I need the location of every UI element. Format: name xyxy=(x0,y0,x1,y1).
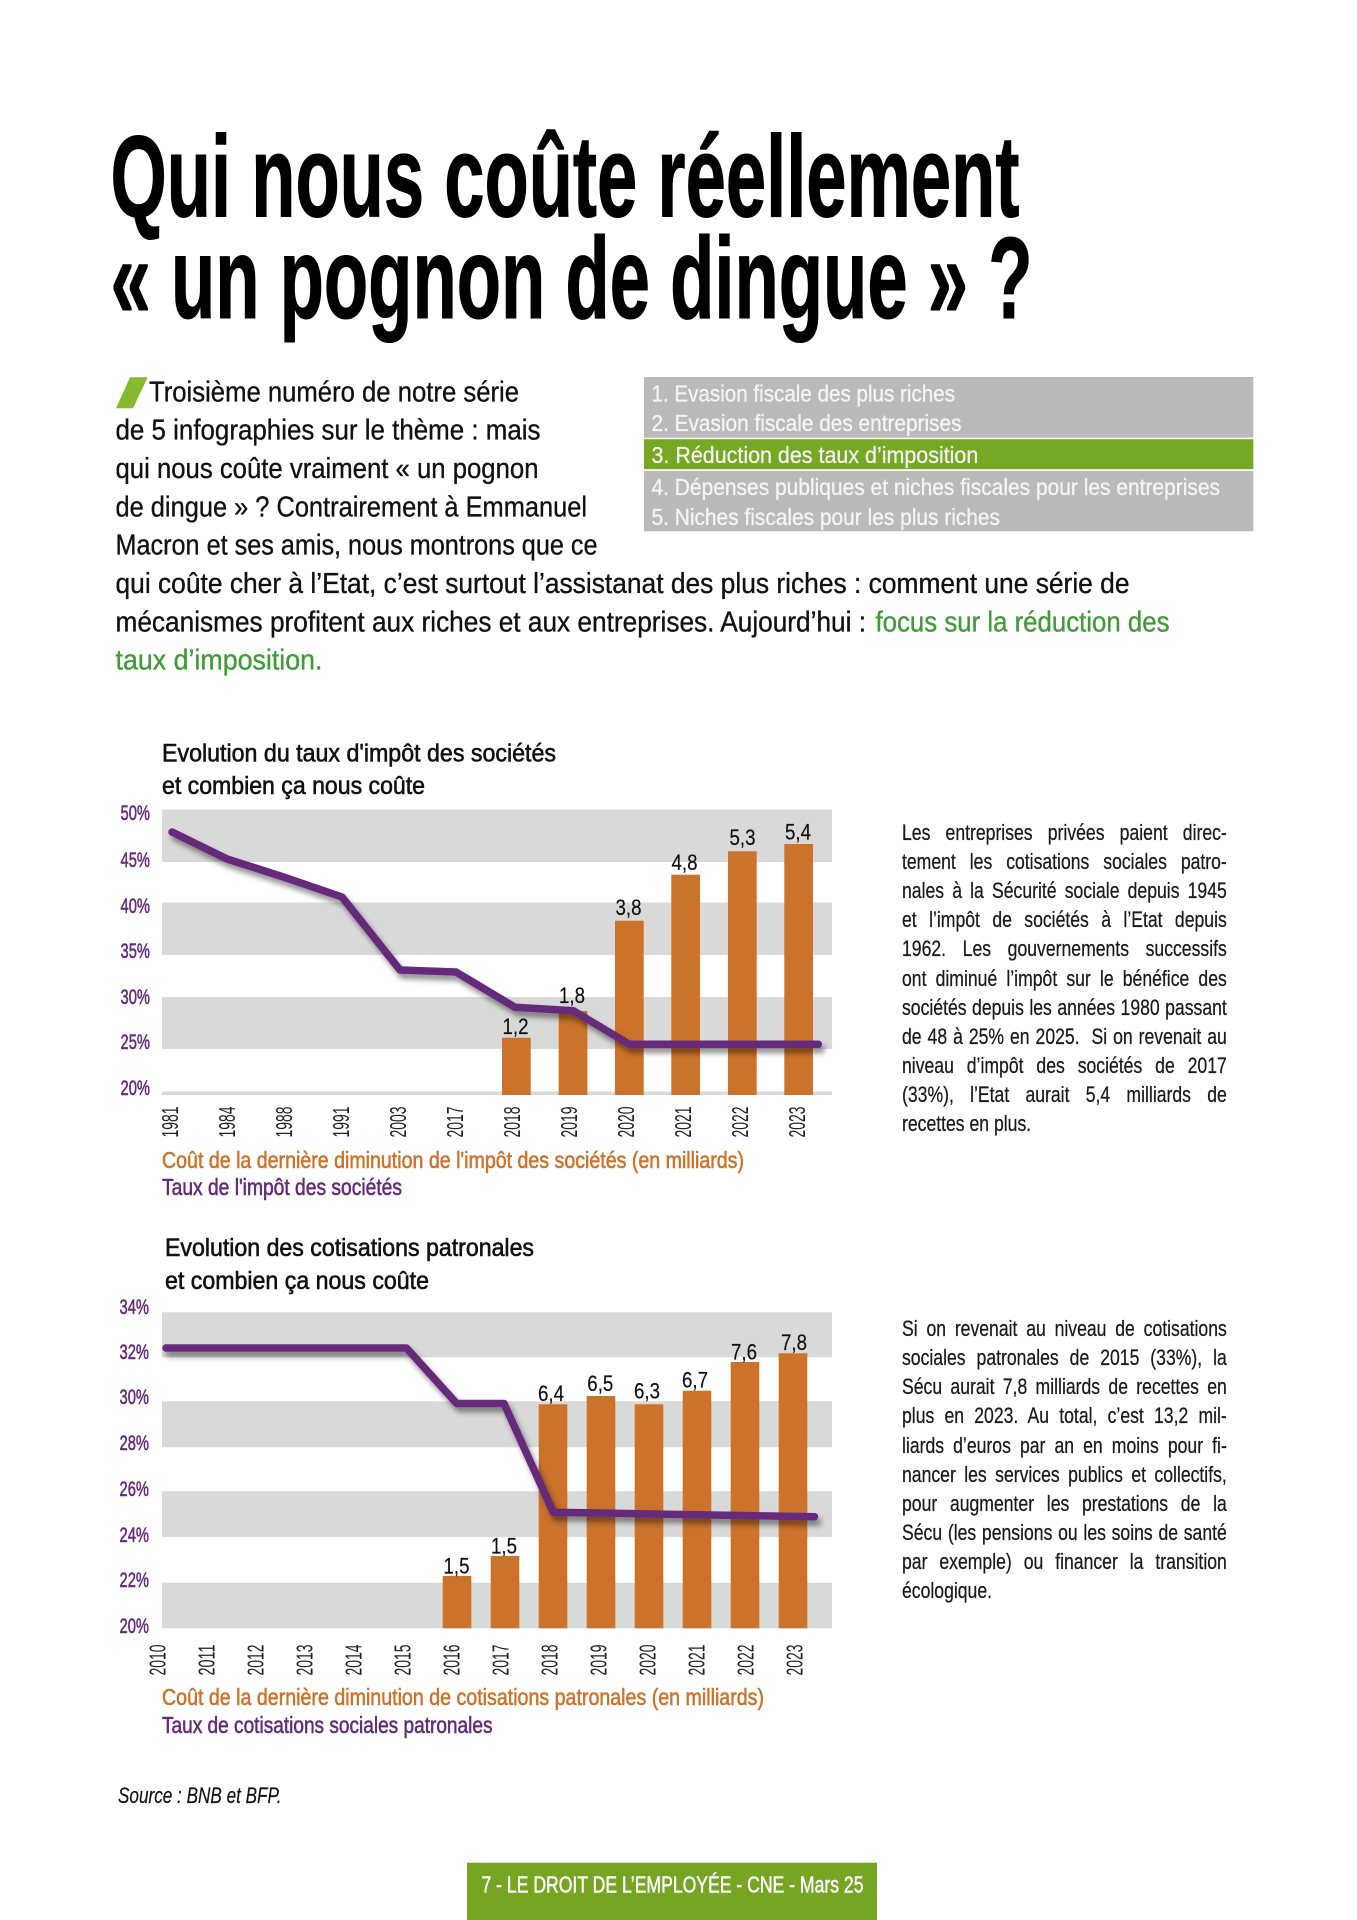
intro text xyxy=(116,376,1170,676)
chart 1 y axis labels xyxy=(120,802,150,1100)
text block: employer contributions explanation: Si on revenait au niveau de cotisations xyxy=(902,1316,1227,1341)
chart 1 x axis labels: 2023 xyxy=(784,1106,810,1138)
chart 1 y axis labels: 20% xyxy=(120,1077,150,1100)
chart 2 y axis labels: 34% xyxy=(120,1296,149,1319)
chart 1 x axis labels: 2022 xyxy=(727,1106,753,1138)
chart 1 legend: Taux de l'impôt des sociétés xyxy=(162,1174,402,1200)
chart 2 bar values: 6,7 xyxy=(682,1368,708,1393)
panel: chart 2 employer contributions xyxy=(120,1234,832,1738)
panel: chart 1 corporate tax xyxy=(120,740,832,1200)
chart 1 x axis labels: 2003 xyxy=(385,1106,411,1138)
text block: corporate tax explanation: recettes en plus. xyxy=(902,1111,1031,1136)
text block: employer contributions explanation: liards d’euros par an en moins pour fi- xyxy=(902,1433,1227,1458)
chart 1 bar values: 1,2 xyxy=(502,1014,528,1039)
chart 1 heading: Evolution du taux d'impôt des sociétés xyxy=(162,740,556,768)
chart 1 x axis labels: 1988 xyxy=(271,1106,297,1138)
chart 2 x axis labels: 2012 xyxy=(242,1644,268,1676)
panel: series menu: 5. Niches fiscales pour les plus riches xyxy=(652,504,1000,530)
chart 1 bar values: 5,3 xyxy=(730,825,756,850)
text block: corporate tax explanation: tement les cotisations sociales patro- xyxy=(902,849,1227,874)
chart 2 legend: Coût de la dernière diminution de cotisations patronales (en milliards) xyxy=(162,1684,764,1710)
panel: series menu: 4. Dépenses publiques et niches fiscales pour les entreprises xyxy=(652,474,1220,500)
chart 2 x axis labels: 2014 xyxy=(340,1644,366,1676)
intro text: focus sur la réduction des xyxy=(876,606,1170,638)
chart 1 x axis labels: 2020 xyxy=(613,1106,639,1138)
chart 2 x axis labels xyxy=(144,1644,808,1676)
title xyxy=(110,112,1032,343)
chart 2 y axis labels: 24% xyxy=(120,1524,149,1547)
chart 2 heading: et combien ça nous coûte xyxy=(165,1267,429,1295)
chart 2 heading xyxy=(165,1234,534,1295)
intro text: mécanismes profitent aux riches et aux entreprises. Aujourd’hui : xyxy=(116,606,866,638)
chart 1 x axis labels: 2017 xyxy=(442,1106,468,1138)
chart 2 y axis labels: 30% xyxy=(120,1386,149,1409)
chart 2 bar values: 6,4 xyxy=(538,1381,564,1406)
intro text: taux d’imposition. xyxy=(116,644,322,676)
source note: Source : BNB et BFP. xyxy=(118,1783,282,1808)
chart 2 x axis labels: 2011 xyxy=(194,1644,220,1676)
text block: employer contributions explanation: par exemple) ou financer la transition xyxy=(902,1549,1227,1574)
chart 2 bar values: 6,5 xyxy=(587,1371,613,1396)
footer band: 7 - LE DROIT DE L’EMPLOYÉE - CNE - Mars 25 xyxy=(482,1872,864,1898)
chart 2 x axis labels: 2023 xyxy=(782,1644,808,1676)
chart 2 y axis labels: 26% xyxy=(120,1478,149,1501)
chart 1 x axis labels: 1984 xyxy=(214,1106,240,1138)
chart 2 grey bands xyxy=(162,1312,832,1628)
chart 1 bar values: 1,8 xyxy=(559,983,585,1008)
text block: corporate tax explanation: de 48 à 25% en 2025. Si on revenait au xyxy=(902,1024,1227,1049)
chart 1 orange bars xyxy=(502,844,813,1095)
chart 2 x axis labels: 2010 xyxy=(144,1644,170,1676)
chart 2 bar values: 7,8 xyxy=(781,1330,807,1355)
chart 2 x axis labels: 2017 xyxy=(488,1644,514,1676)
chart 1 x axis labels: 1981 xyxy=(157,1106,183,1138)
chart 2 contribution rate line xyxy=(166,1348,814,1517)
panel: series menu xyxy=(644,377,1253,531)
chart 2 bar values: 7,6 xyxy=(731,1339,757,1364)
chart 2 y axis labels: 22% xyxy=(120,1569,149,1592)
chart 1 heading: et combien ça nous coûte xyxy=(162,772,425,800)
chart 1 x axis labels: 2021 xyxy=(670,1106,696,1138)
chart 2 x axis labels: 2022 xyxy=(732,1644,758,1676)
chart 1 y axis labels: 40% xyxy=(120,895,150,918)
chart 1 y axis labels: 45% xyxy=(120,849,150,872)
footer band xyxy=(467,1863,877,1920)
chart 1 bar values xyxy=(502,819,811,1039)
intro text: qui nous coûte vraiment « un pognon xyxy=(116,453,538,485)
text block: corporate tax explanation: (33%), l’Etat aurait 5,4 milliards de xyxy=(902,1082,1227,1107)
chart 2 x axis labels: 2015 xyxy=(390,1644,416,1676)
chart 2 orange bars xyxy=(443,1353,807,1628)
chart 2 x axis labels: 2018 xyxy=(536,1644,562,1676)
chart 1 grey bands xyxy=(162,810,832,1095)
chart 1 bar values: 3,8 xyxy=(616,895,642,920)
text block: employer contributions explanation: sociales patronales de 2015 (33%), la xyxy=(902,1345,1227,1370)
text block: employer contributions explanation: Sécu aurait 7,8 milliards de recettes en xyxy=(902,1374,1227,1399)
chart 2 bar values: 6,3 xyxy=(634,1379,660,1404)
text block: corporate tax explanation: nales à la Sécurité sociale depuis 1945 xyxy=(902,878,1227,903)
text block: corporate tax explanation: Les entreprises privées paient direc- xyxy=(902,820,1227,845)
chart 1 x axis labels: 2018 xyxy=(499,1106,525,1138)
text block: employer contributions explanation: nancer les services publics et collectifs, xyxy=(902,1462,1227,1487)
chart 1 legend: Coût de la dernière diminution de l'impôt des sociétés (en milliards) xyxy=(162,1147,744,1173)
intro text: Troisième numéro de notre série xyxy=(149,376,519,408)
text block: corporate tax explanation: niveau d’impôt des sociétés de 2017 xyxy=(902,1053,1227,1078)
text block: employer contributions explanation: Sécu (les pensions ou les soins de santé xyxy=(902,1520,1227,1545)
text block: corporate tax explanation: ont diminué l’impôt sur le bénéfice des xyxy=(902,966,1227,991)
intro text: de 5 infographies sur le thème : mais xyxy=(116,415,540,447)
chart 2 legend: Taux de cotisations sociales patronales xyxy=(162,1712,492,1738)
chart 2 x axis labels: 2020 xyxy=(634,1644,660,1676)
chart 1 y axis labels: 35% xyxy=(120,940,150,963)
chart 1 y axis labels: 30% xyxy=(120,986,150,1009)
chart 1 legend xyxy=(162,1147,744,1200)
panel: series menu: 1. Evasion fiscale des plus riches xyxy=(652,381,955,407)
chart 1 heading xyxy=(162,740,556,800)
chart 1 y axis labels: 25% xyxy=(120,1031,150,1054)
text block: corporate tax explanation xyxy=(902,820,1227,1136)
chart 2 x axis labels: 2019 xyxy=(586,1644,612,1676)
chart 2 y axis labels: 32% xyxy=(120,1341,149,1364)
icon: green slash xyxy=(116,377,148,408)
chart 1 x axis labels: 1991 xyxy=(328,1106,354,1138)
text block: corporate tax explanation: et l’impôt de sociétés à l’Etat depuis xyxy=(902,907,1227,932)
chart 2 y axis labels xyxy=(120,1296,149,1638)
intro text: de dingue » ? Contrairement à Emmanuel xyxy=(116,491,587,523)
chart 1 bar values: 5,4 xyxy=(785,819,811,844)
chart 2 legend xyxy=(162,1684,764,1738)
chart 2 heading: Evolution des cotisations patronales xyxy=(165,1234,534,1262)
intro text: qui coûte cher à l’Etat, c’est surtout l’assistanat des plus riches : comment une série de xyxy=(116,568,1130,600)
chart 2 y axis labels: 20% xyxy=(120,1615,149,1638)
chart 2 x axis labels: 2021 xyxy=(684,1644,710,1676)
chart 2 bar values: 1,5 xyxy=(491,1533,517,1558)
chart 2 y axis labels: 28% xyxy=(120,1432,149,1455)
chart 2 bar values: 1,5 xyxy=(444,1553,470,1578)
chart 2 x axis labels: 2016 xyxy=(438,1644,464,1676)
text block: employer contributions explanation: pour augmenter les prestations de la xyxy=(902,1491,1227,1516)
intro text: Macron et ses amis, nous montrons que ce xyxy=(116,530,598,562)
panel: series menu: 2. Evasion fiscale des entreprises xyxy=(652,410,962,436)
chart 1 y axis labels: 50% xyxy=(120,802,150,825)
panel: series menu: 3. Réduction des taux d’imposition xyxy=(652,442,978,468)
text block: employer contributions explanation: plus en 2023. Au total, c’est 13,2 mil- xyxy=(902,1403,1227,1428)
text block: corporate tax explanation: sociétés depuis les années 1980 passant xyxy=(902,995,1227,1020)
chart 1 x axis labels xyxy=(157,1106,810,1138)
chart 1 bar values: 4,8 xyxy=(672,850,698,875)
chart 1 tax rate line xyxy=(172,832,818,1044)
chart 1 x axis labels: 2019 xyxy=(556,1106,582,1138)
text block: employer contributions explanation: écologique. xyxy=(902,1578,992,1603)
text block: employer contributions explanation xyxy=(902,1316,1227,1603)
chart 2 bar values xyxy=(444,1330,807,1578)
chart 2 x axis labels: 2013 xyxy=(292,1644,318,1676)
text block: corporate tax explanation: 1962. Les gouvernements successifs xyxy=(902,936,1227,961)
